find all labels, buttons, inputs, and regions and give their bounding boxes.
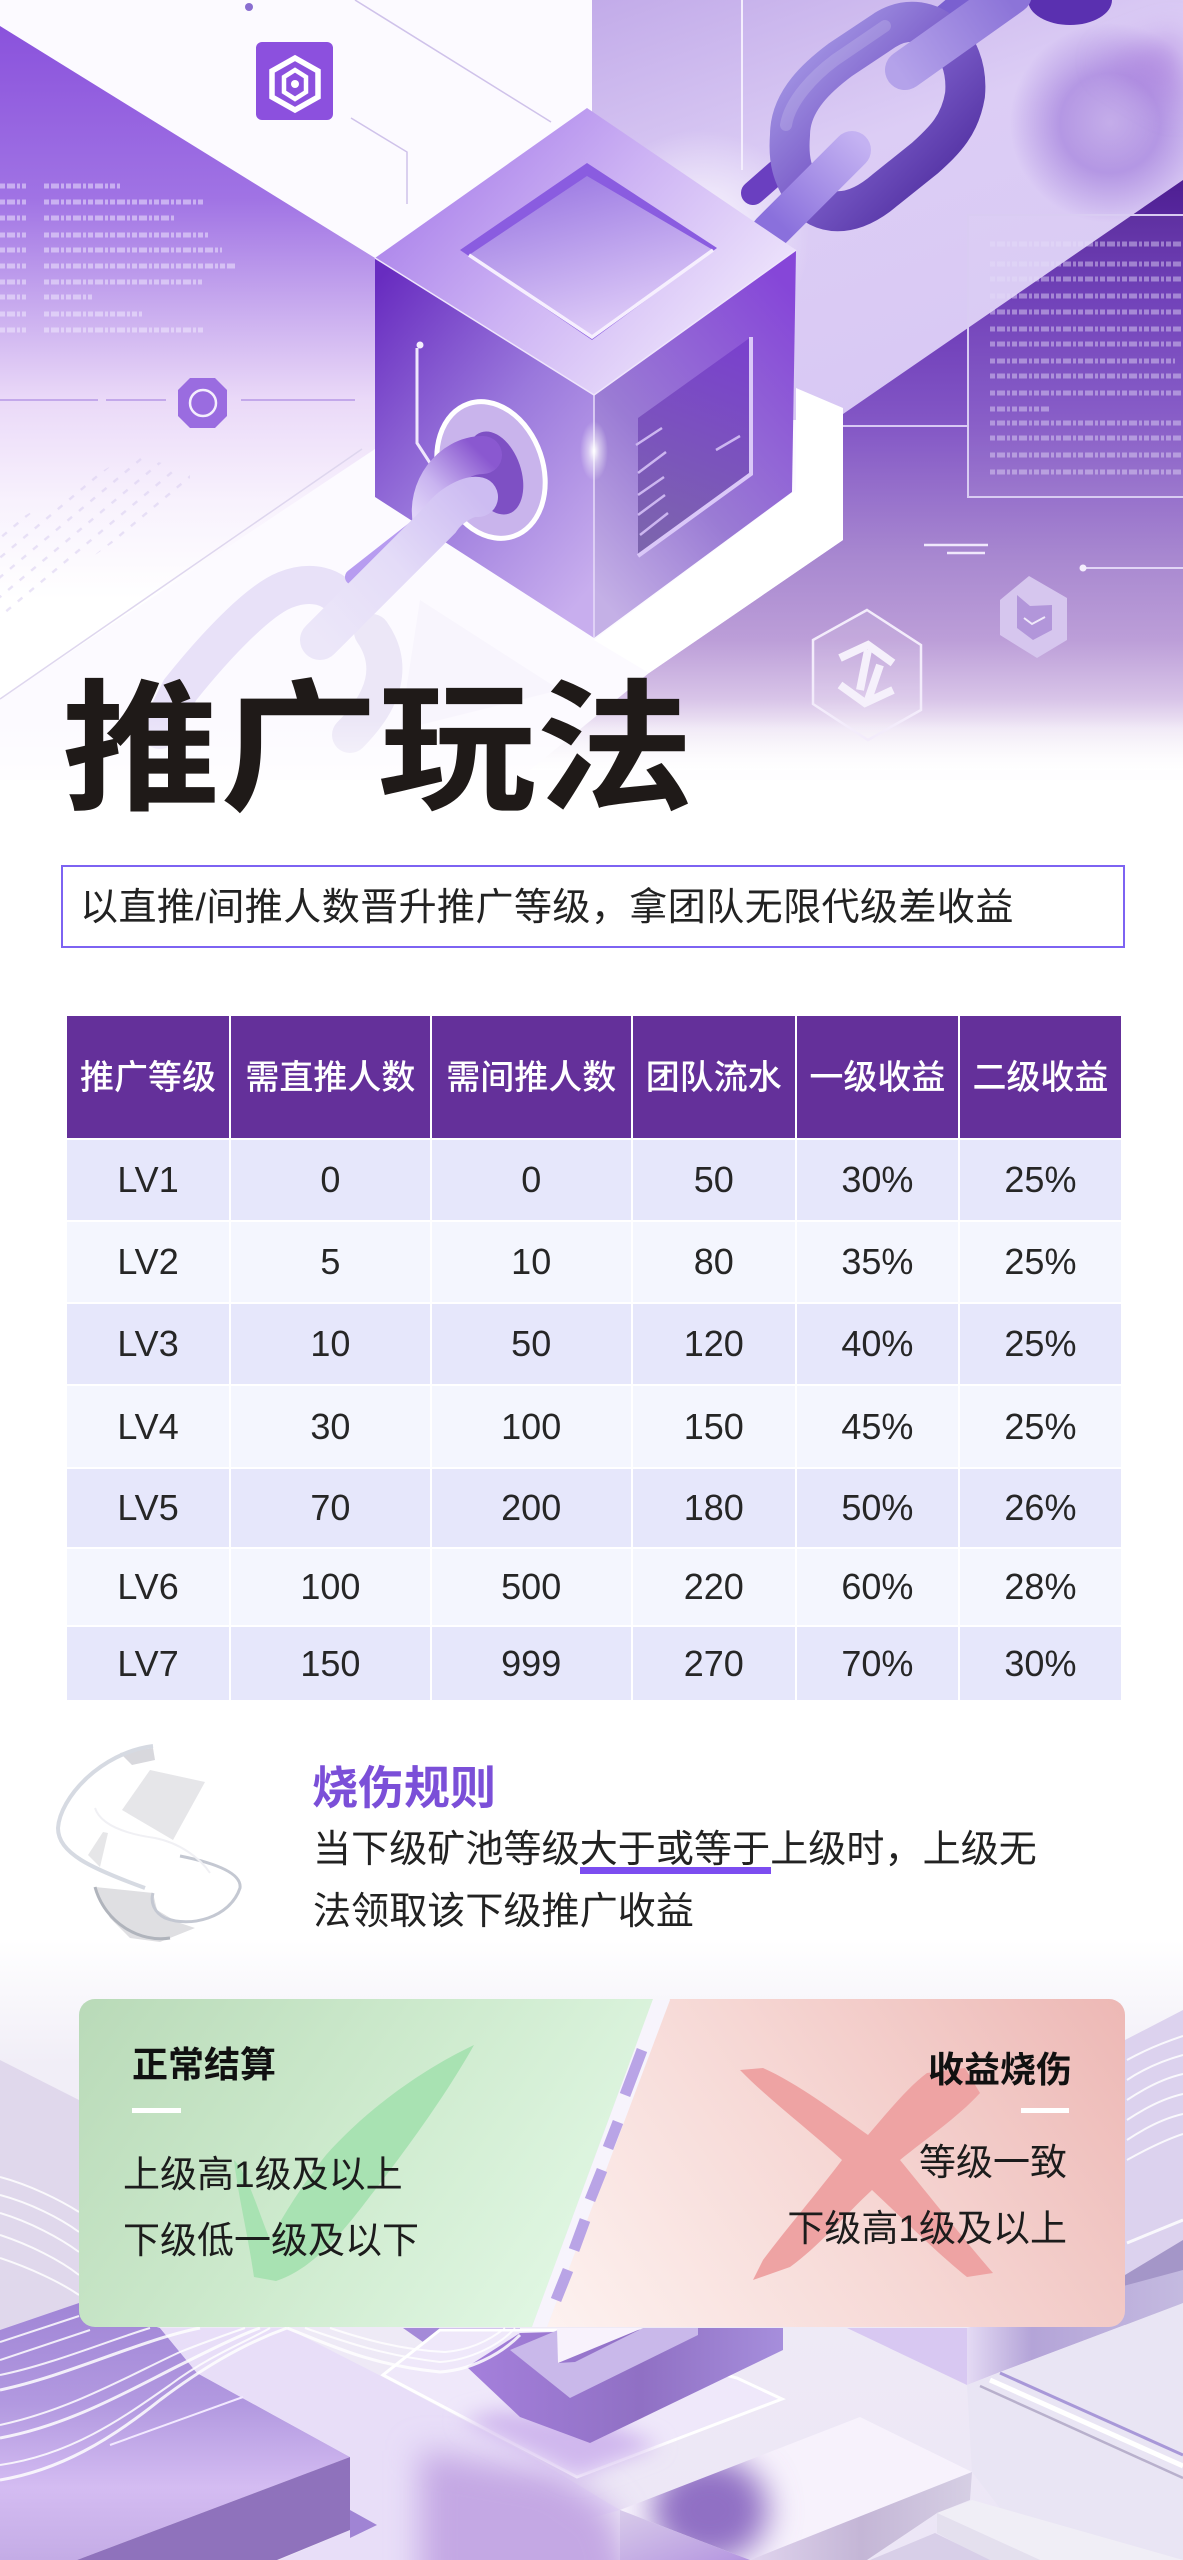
normal settlement heading: 正常结算 bbox=[132, 2044, 276, 2085]
normal settlement text: 下级低一级及以下 bbox=[123, 2220, 419, 2261]
icon: red cross mark bbox=[740, 2068, 993, 2280]
table: promotion levels: 26% bbox=[1004, 1487, 1076, 1528]
fade to white beneath title bbox=[0, 720, 1183, 810]
table: promotion levels: 需间推人数 bbox=[446, 1059, 616, 1097]
normal settlement text: 上级高1级及以上 bbox=[123, 2154, 403, 2195]
dash bbox=[1021, 2108, 1069, 2113]
table: promotion levels: 10 bbox=[511, 1241, 551, 1282]
table: promotion levels: 0 bbox=[320, 1159, 340, 1200]
table: promotion levels: 25% bbox=[1004, 1159, 1076, 1200]
panel: burned earnings bbox=[547, 1999, 1125, 2327]
normal settlement text bbox=[124, 2156, 417, 2256]
bottom illustration bbox=[0, 1940, 1183, 2560]
subtitle box bbox=[61, 865, 1125, 948]
decorative tech lines bbox=[0, 0, 1183, 699]
left pseudo-text block bbox=[0, 186, 235, 330]
table: promotion levels: 28% bbox=[1004, 1566, 1076, 1607]
decorative stripes between panels bbox=[532, 2000, 670, 2327]
table: promotion levels: 25% bbox=[1004, 1323, 1076, 1364]
table: promotion levels: 0 bbox=[521, 1159, 541, 1200]
panel: normal settlement bbox=[79, 1999, 653, 2327]
table: promotion levels: 50% bbox=[841, 1487, 913, 1528]
icon: green check mark bbox=[234, 2045, 474, 2281]
table: promotion levels: 100 bbox=[300, 1566, 360, 1607]
chain: upper right links bbox=[753, 0, 1112, 232]
top background panels bbox=[0, 0, 1183, 780]
rule text: 法领取该下级推广收益 bbox=[313, 1891, 694, 1933]
rule text: 当下级矿池等级大于或等于上级时，上级无 bbox=[313, 1829, 1037, 1871]
table: promotion levels: 60% bbox=[841, 1566, 913, 1607]
table: promotion levels: 50 bbox=[694, 1159, 734, 1200]
table: promotion levels: 150 bbox=[684, 1406, 744, 1446]
table: promotion levels: LV7 bbox=[117, 1642, 179, 1684]
icon: glass ribbon bbox=[56, 1744, 242, 1942]
table: promotion levels: 10 bbox=[310, 1323, 350, 1364]
table: promotion levels: 二级收益 bbox=[972, 1059, 1108, 1097]
icon: small hexagon ring bbox=[178, 378, 227, 428]
table: promotion levels: 50 bbox=[511, 1323, 551, 1364]
table: promotion levels: LV3 bbox=[117, 1323, 179, 1364]
table: promotion levels: 70% bbox=[841, 1642, 913, 1684]
burned earnings text: 下级高1级及以上 bbox=[787, 2208, 1067, 2249]
table: promotion levels: 45% bbox=[841, 1406, 913, 1446]
table: promotion levels: LV6 bbox=[117, 1566, 179, 1607]
table: promotion levels: 推广等级 bbox=[80, 1059, 216, 1097]
burned earnings heading: 收益烧伤 bbox=[928, 2049, 1072, 2090]
right pseudo-text panel bbox=[968, 215, 1183, 497]
table: promotion levels: 需直推人数 bbox=[245, 1059, 415, 1097]
rule heading: 烧伤规则 bbox=[312, 1762, 496, 1814]
decorative light waves bbox=[0, 2036, 1183, 2480]
table: promotion levels: 100 bbox=[501, 1406, 561, 1446]
chain: lower left links bbox=[160, 387, 563, 735]
title: 推广玩法 bbox=[62, 671, 694, 829]
table: promotion levels: LV1 bbox=[117, 1159, 179, 1200]
table: promotion levels: 70 bbox=[310, 1487, 350, 1528]
table: promotion levels: LV5 bbox=[117, 1487, 179, 1528]
table: promotion levels: 40% bbox=[841, 1323, 913, 1364]
table: promotion levels: 120 bbox=[684, 1323, 744, 1364]
table: promotion levels: 500 bbox=[501, 1566, 561, 1607]
burned earnings text: 等级一致 bbox=[919, 2142, 1067, 2183]
icon: outlined hexagon mark bbox=[813, 610, 921, 740]
table: promotion levels: 180 bbox=[684, 1487, 744, 1528]
table: promotion levels: 团队流水 bbox=[646, 1059, 782, 1097]
underline highlight bbox=[580, 1867, 771, 1874]
table: promotion levels: LV4 bbox=[117, 1406, 179, 1446]
burned earnings text bbox=[789, 2144, 1066, 2244]
table: promotion levels: 5 bbox=[320, 1241, 340, 1282]
table: promotion levels: 一级收益 bbox=[809, 1059, 945, 1097]
dash bbox=[132, 2108, 181, 2113]
table: promotion levels: 999 bbox=[501, 1642, 561, 1684]
table: promotion levels bbox=[67, 1016, 1121, 1700]
subtitle text: 以直推/间推人数晋升推广等级，拿团队无限代级差收益 bbox=[80, 887, 1014, 929]
icon: shield hexagon bbox=[1000, 576, 1067, 658]
table: promotion levels: 220 bbox=[684, 1566, 744, 1607]
table: promotion levels: 30% bbox=[841, 1159, 913, 1200]
table: promotion levels: 200 bbox=[501, 1487, 561, 1528]
cube bbox=[375, 108, 796, 638]
table: promotion levels: 30 bbox=[310, 1406, 350, 1446]
table: promotion levels: 30% bbox=[1004, 1642, 1076, 1684]
table: promotion levels: 150 bbox=[300, 1642, 360, 1684]
table: promotion levels: 35% bbox=[841, 1241, 913, 1282]
dotted pattern bbox=[0, 455, 190, 620]
table: promotion levels: 270 bbox=[684, 1642, 744, 1684]
icon: purple rounded badge bbox=[256, 42, 333, 120]
table: promotion levels: 80 bbox=[694, 1241, 734, 1282]
table: promotion levels: 25% bbox=[1004, 1406, 1076, 1446]
table: promotion levels: 25% bbox=[1004, 1241, 1076, 1282]
table: promotion levels: LV2 bbox=[117, 1241, 179, 1282]
rule text bbox=[313, 1829, 1037, 1933]
